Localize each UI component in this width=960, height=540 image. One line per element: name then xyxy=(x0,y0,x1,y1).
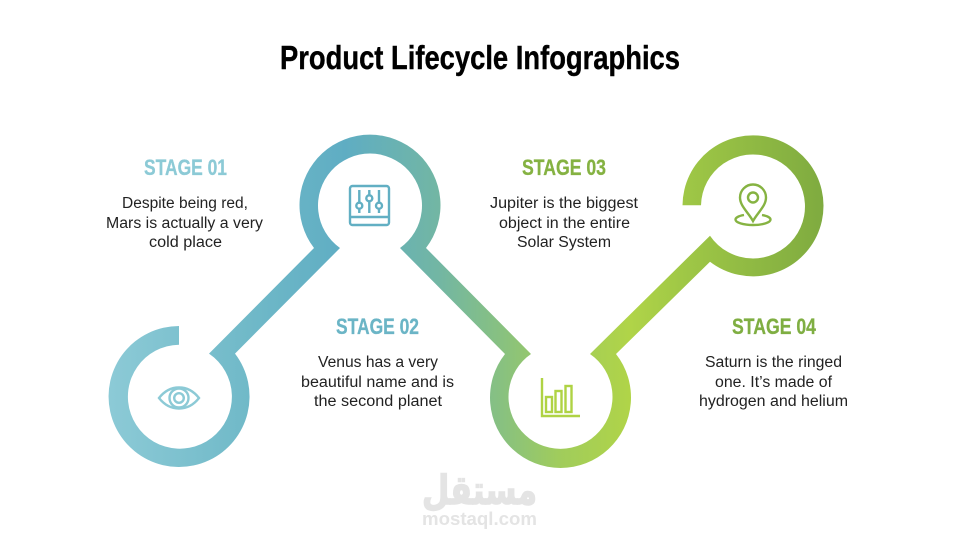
stage 04 text: Saturn is the ringed xyxy=(705,354,842,371)
stage 04 text: STAGE 04 xyxy=(732,314,816,339)
stage 03 text: Solar System xyxy=(517,234,611,251)
stage 02 text xyxy=(301,314,454,410)
stage 03 text: STAGE 03 xyxy=(522,155,606,180)
stage 01 text: cold place xyxy=(149,234,222,251)
stage 01 text: Mars is actually a very xyxy=(106,215,263,232)
icon: location pin xyxy=(736,185,770,225)
icon: bar chart xyxy=(542,378,580,416)
watermark xyxy=(422,468,537,529)
title: Product Lifecycle Infographics xyxy=(280,39,680,76)
stage 01 text xyxy=(106,155,263,251)
stage 03 text xyxy=(490,155,639,251)
lifecycle ribbon path xyxy=(109,135,823,468)
stage 04 text: hydrogen and helium xyxy=(699,393,848,410)
stage 04 text xyxy=(699,314,848,410)
stage 03 text: Jupiter is the biggest xyxy=(490,195,639,212)
stage 02 text: the second planet xyxy=(314,393,443,410)
stage 02 text: Venus has a very xyxy=(318,354,438,371)
watermark: mostaql.com xyxy=(422,509,537,529)
icon: eye xyxy=(159,388,199,408)
stage 01 text: Despite being red, xyxy=(122,195,248,212)
stage 01 text: STAGE 01 xyxy=(144,155,227,180)
stage 02 text: beautiful name and is xyxy=(301,374,454,391)
stage 02 text: STAGE 02 xyxy=(336,314,419,339)
icon: sliders panel xyxy=(350,186,389,225)
stage 04 text: one. It’s made of xyxy=(715,374,833,391)
watermark: مستقل xyxy=(422,468,537,514)
stage 03 text: object in the entire xyxy=(499,215,630,232)
